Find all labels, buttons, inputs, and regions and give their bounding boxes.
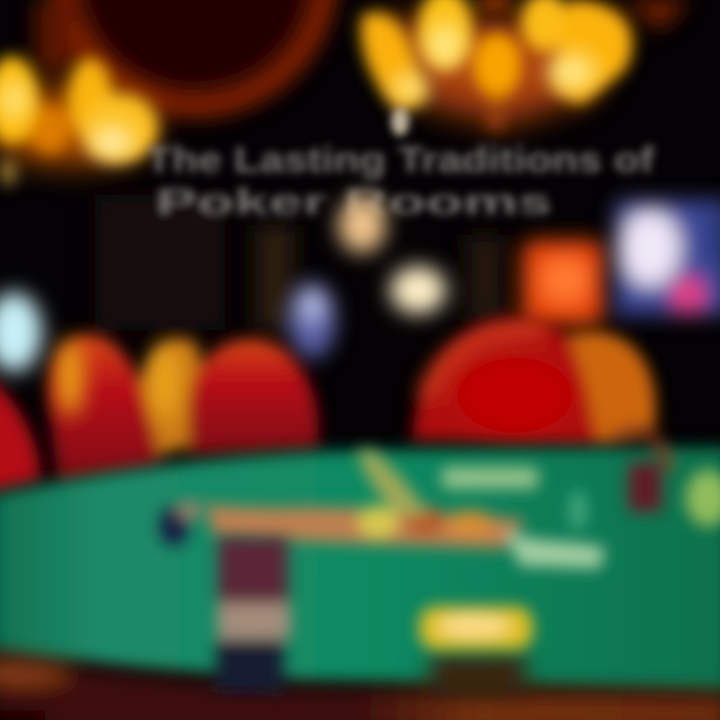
icon: glowing lamp upper	[338, 197, 386, 253]
panel: green poker table	[0, 447, 720, 692]
panel: screen right	[615, 200, 720, 315]
icon: gold chip stack	[420, 607, 532, 695]
icon: chandelier left	[0, 56, 158, 186]
title: Poker Rooms	[156, 181, 552, 222]
panel: back wall lattice	[95, 195, 505, 330]
title: The Lasting Traditions of	[146, 139, 655, 180]
icon: standing dealer figure	[216, 537, 290, 692]
title	[146, 139, 655, 222]
icon: player at right of table	[614, 431, 670, 512]
icon: chandelier right	[361, 0, 632, 136]
panel: red lantern	[522, 240, 604, 325]
icon: blue light	[288, 282, 336, 358]
panel: red chairs	[0, 319, 656, 495]
icon: glowing lamp lower	[390, 266, 446, 314]
panel: ceiling arc	[35, 0, 690, 105]
icon: blue globe left	[0, 292, 42, 372]
icon: player hand left	[159, 501, 203, 546]
table rail	[0, 652, 720, 720]
panel: cards and chips on table	[205, 450, 720, 568]
